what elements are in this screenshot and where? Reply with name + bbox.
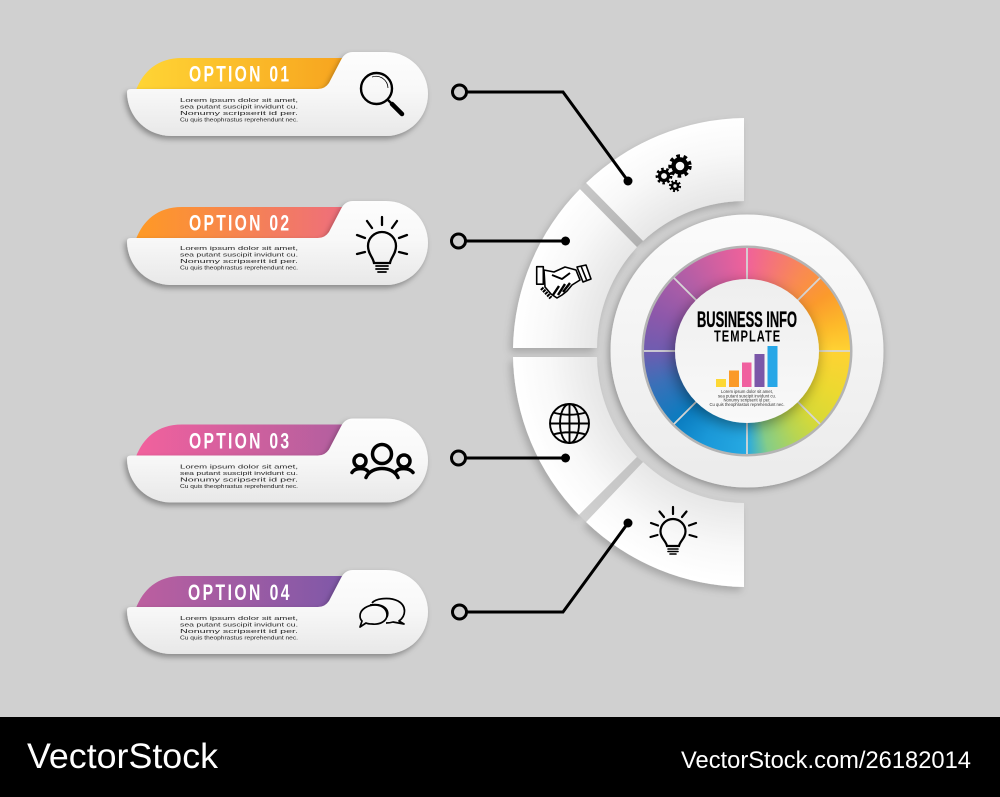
text block: option 03: Cu quis theophrastus reprehendunt nec. xyxy=(180,484,298,490)
text block: option 03: Nonumy scripserit id per. xyxy=(180,478,299,484)
text block: option 01 xyxy=(180,98,299,124)
panel: option 04 xyxy=(127,570,428,654)
text block: option 04 xyxy=(180,616,299,642)
gap shade: upper diagonal xyxy=(580,183,643,247)
footer bar xyxy=(0,717,1000,797)
text block: option 01: sea putant suscipit invidunt cu. xyxy=(180,104,299,110)
colour ring xyxy=(644,248,850,454)
centre text block: Nonumy scripserit id per. xyxy=(724,398,770,402)
centre text block xyxy=(710,389,784,407)
icon: light bulb small xyxy=(650,507,696,554)
heading: option 01: OPTION 01 xyxy=(189,63,289,87)
centre text block: sea putant suscipit invidunt cu. xyxy=(718,393,776,398)
text block: option 03 xyxy=(180,464,299,490)
ring separators xyxy=(644,248,850,454)
text block: option 02: Nonumy scripserit id per. xyxy=(180,259,299,265)
text block: option 01: Lorem ipsum dolor sit amet, xyxy=(180,98,299,104)
footer logo: VectorStock xyxy=(27,737,219,776)
text block: option 03: sea putant suscipit invidunt cu. xyxy=(180,471,299,477)
text block: option 01: Nonumy scripserit id per. xyxy=(180,111,299,117)
centre text block: Cu quis theophrastus reprehendunt nec. xyxy=(710,402,784,407)
gap shade: lower diagonal xyxy=(579,457,643,522)
panel: option 01 xyxy=(127,52,428,136)
panel: option 02 xyxy=(127,201,428,285)
heading: option 04: OPTION 04 xyxy=(188,581,290,606)
icon: people xyxy=(352,444,413,478)
text block: option 03: Lorem ipsum dolor sit amet, xyxy=(180,464,299,470)
title: BUSINESS INFO xyxy=(697,307,797,332)
connector 1 xyxy=(452,85,632,186)
subtitle: TEMPLATE xyxy=(714,328,780,345)
icon: magnifier xyxy=(361,73,402,114)
panel: segment 2 xyxy=(513,189,637,348)
text block: option 02: sea putant suscipit invidunt cu. xyxy=(180,252,299,258)
text block: option 04: Lorem ipsum dolor sit amet, xyxy=(180,616,299,622)
text block: option 04: Cu quis theophrastus reprehendunt nec. xyxy=(180,636,298,642)
heading: option 03: OPTION 03 xyxy=(189,430,289,454)
icon: globe xyxy=(550,404,589,443)
bar chart xyxy=(716,346,778,387)
icon: handshake xyxy=(537,265,591,298)
connector 2 xyxy=(452,234,570,248)
text block: option 02: Cu quis theophrastus reprehendunt nec. xyxy=(180,266,298,272)
text block: option 04: Nonumy scripserit id per. xyxy=(180,629,299,635)
icon: gears xyxy=(657,156,690,191)
connector 4 xyxy=(452,518,632,619)
text block: option 04: sea putant suscipit invidunt cu. xyxy=(180,622,299,628)
heading: option 02: OPTION 02 xyxy=(189,212,289,236)
chart: central wheel xyxy=(610,214,884,488)
panel: segment 1 xyxy=(586,118,744,241)
footer url: VectorStock.com/26182014 xyxy=(681,747,971,774)
connector 3 xyxy=(452,451,570,465)
panel: segment 4 xyxy=(586,462,744,587)
centre text block: Lorem ipsum dolor sit amet, xyxy=(721,389,773,394)
text block: option 02: Lorem ipsum dolor sit amet, xyxy=(180,246,299,252)
panel: option 03 xyxy=(127,418,428,502)
centre disc xyxy=(675,279,819,423)
panel: segment 3 xyxy=(513,357,637,515)
text block: option 01: Cu quis theophrastus reprehendunt nec. xyxy=(180,118,298,124)
icon: light bulb xyxy=(357,217,407,272)
icon: chat bubbles xyxy=(360,599,404,627)
text block: option 02 xyxy=(180,246,299,272)
